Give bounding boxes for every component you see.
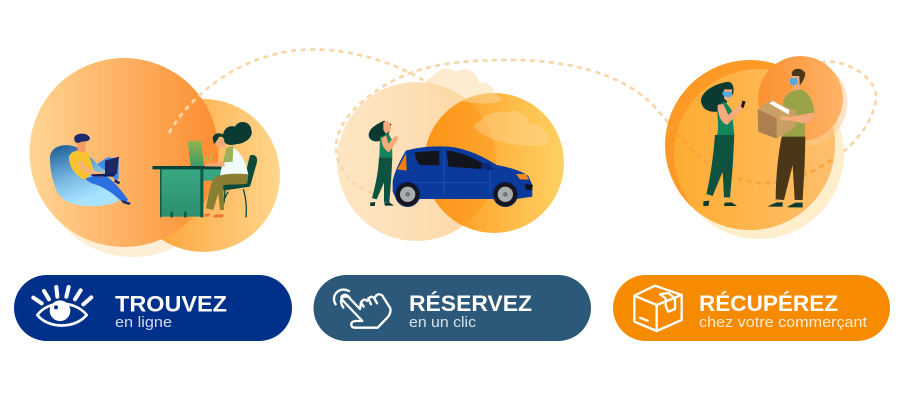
dashed path: first leg	[169, 50, 470, 145]
woman with phone	[369, 121, 399, 206]
man with parcel	[758, 69, 814, 207]
circle shadow	[39, 69, 227, 257]
subheading: en un clic	[409, 314, 477, 331]
dashed path: second leg	[336, 60, 876, 193]
main circle	[665, 60, 835, 230]
person on bean bag	[50, 134, 131, 206]
subheading: en ligne	[115, 314, 172, 331]
heading: TROUVEZ	[115, 292, 227, 316]
main circle	[30, 58, 218, 247]
right circle	[127, 99, 280, 252]
panel: trouvez illustration	[30, 50, 470, 257]
panel: récupérez illustration	[665, 56, 848, 239]
pill	[14, 275, 292, 341]
button: récupérez	[613, 275, 890, 341]
clouds	[427, 68, 549, 146]
orange circle	[424, 93, 564, 233]
car	[393, 146, 533, 207]
panel: réservez illustration	[336, 60, 876, 241]
icon: eye	[33, 287, 91, 325]
button: trouvez	[14, 275, 292, 341]
dashes over the main circle	[668, 121, 832, 184]
woman with mask	[701, 82, 746, 206]
overlap of the two circles	[426, 99, 496, 226]
pill	[613, 275, 890, 341]
person at desk	[152, 122, 257, 217]
small circle	[758, 56, 843, 141]
pale circle	[337, 82, 496, 241]
pill	[314, 275, 591, 341]
icon: parcel	[634, 286, 682, 331]
heading: RÉCUPÉREZ	[699, 291, 838, 316]
subheading: chez votre commerçant	[699, 314, 868, 331]
inner lighter disc	[674, 69, 835, 230]
pale circle behind	[674, 69, 844, 239]
heading: RÉSERVEZ	[409, 291, 532, 316]
small circle shadow	[762, 60, 848, 146]
icon: pointing hand	[334, 290, 391, 328]
button: réservez	[314, 275, 591, 341]
